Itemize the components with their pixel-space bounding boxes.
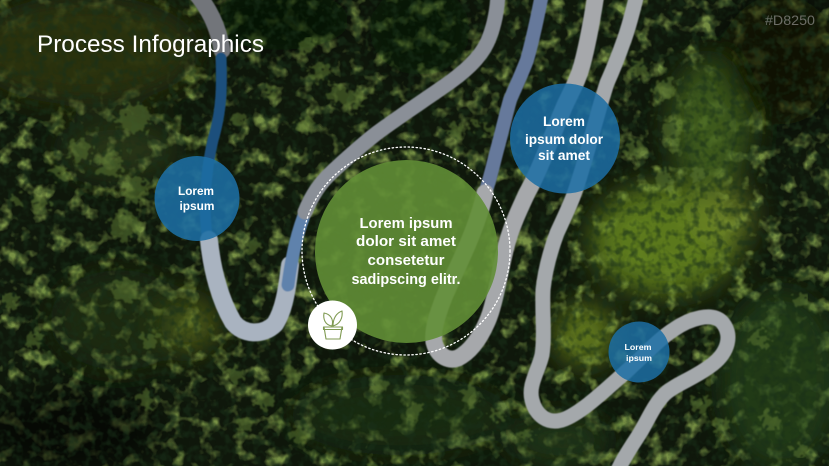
icon: potted plant in white circle [308, 300, 357, 350]
blue circle: bottom right: ipsum [626, 353, 652, 363]
road: shaded blue segment [205, 58, 221, 235]
road: long diagonal to the top [305, 0, 498, 212]
road: left hairpin rising arm [288, 205, 308, 285]
main green circle with text: sadipscing elitr. [352, 272, 460, 288]
main green circle with text [315, 160, 498, 343]
blue circle: top right: ipsum dolor [525, 132, 604, 147]
road: centre blue-grey descending [485, 0, 542, 193]
title: Process Infographics [37, 31, 264, 58]
road: top-left grey segment [197, 0, 222, 50]
road: centre hairpin [434, 0, 596, 359]
main green circle with text: dolor sit amet [356, 234, 456, 250]
road: right long descending with lower-right double hairpin [531, 0, 728, 466]
main green circle with text: Lorem ipsum [360, 216, 452, 232]
blue circle: top right: Lorem [543, 114, 585, 129]
blue circle: left: ipsum [180, 201, 214, 213]
blue circle: bottom right: Lorem [624, 342, 652, 352]
dotted ring around main circle [302, 147, 510, 355]
main green circle with text: consetetur [368, 253, 445, 269]
watermark code: #D8250 [765, 12, 815, 28]
roads winding through the forest [197, 0, 728, 466]
blue circle: top right: sit amet [538, 148, 591, 163]
blue circle: bottom right [608, 322, 670, 382]
blue circle: left: Lorem [178, 186, 214, 198]
road: left hairpin [209, 240, 290, 332]
blue circle: top right [510, 84, 620, 194]
blue circle: left [154, 156, 240, 241]
